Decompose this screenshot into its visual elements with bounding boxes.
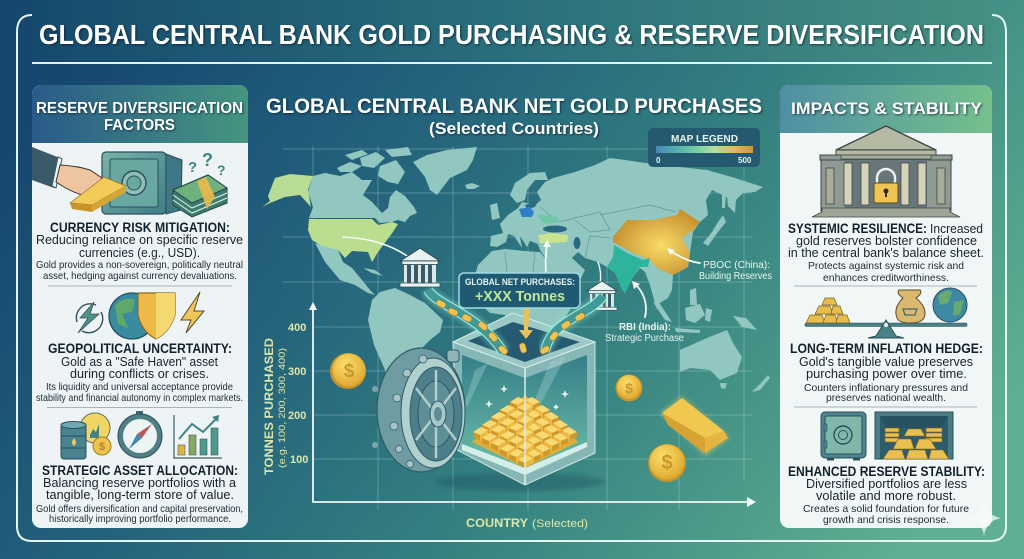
icon: gold in vault — [875, 412, 953, 459]
axis arrowheads — [309, 302, 756, 507]
x axis title: (Selected) — [532, 518, 588, 530]
panel heading: FACTORS — [104, 117, 175, 134]
y axis note: (e.g. 100, 200, 300, 400) — [277, 348, 288, 468]
panel heading: RESERVE DIVERSIFICATION — [36, 100, 243, 117]
panel: impacts and stability — [780, 85, 992, 528]
arrowheads on map — [543, 240, 675, 289]
arrows on map — [343, 237, 700, 317]
china label: Building Reserves — [699, 271, 772, 282]
text: enhanced reserve stability: growth and crisis response. — [823, 514, 949, 526]
coin: left — [330, 353, 366, 389]
text: currency risk mitigation: CURRENCY RISK MITIGATION: — [50, 220, 230, 235]
text: currency risk mitigation — [36, 220, 243, 282]
gold arrow centre — [519, 306, 533, 354]
sparkle — [968, 503, 1001, 536]
panel: world map — [262, 146, 770, 510]
coin: middle — [616, 374, 642, 402]
bank icon: right — [587, 281, 617, 310]
map legend: 500 — [738, 156, 752, 165]
x axis title: COUNTRY — [466, 518, 528, 530]
icon: safe — [821, 412, 866, 460]
text: strategic asset allocation: Balancing reserve portfolios with a — [43, 475, 237, 490]
text: systemic resilience: SYSTEMIC RESILIENCE: — [788, 221, 927, 236]
text: enhanced reserve stability: Diversified portfolios are less — [806, 476, 967, 491]
gold vault box — [435, 313, 605, 491]
icon: question marks — [188, 150, 226, 178]
gold flow: right — [539, 296, 603, 355]
banner rule — [32, 62, 992, 64]
panel heading: IMPACTS & STABILITY — [791, 99, 983, 118]
icon: volatility arrows — [76, 302, 103, 333]
icon: bar chart — [174, 415, 222, 458]
text: systemic resilience — [788, 221, 984, 284]
text: geopolitical uncertainty: Its liquidity and universal acceptance provide — [46, 381, 233, 393]
text: systemic resilience: enhances creditworthiness. — [823, 272, 949, 284]
text: enhanced reserve stability: volatile and more robust. — [816, 488, 956, 503]
panel header — [780, 85, 992, 133]
callout: GLOBAL NET PURCHASES: — [465, 277, 575, 287]
callout — [459, 273, 580, 308]
text: long-term inflation hedge: preserves national wealth. — [826, 392, 946, 404]
text: strategic asset allocation: tangible, long-term store of value. — [46, 487, 234, 502]
chart axes — [313, 306, 751, 502]
icon: cash stack — [173, 175, 227, 217]
bank icon: left — [400, 248, 440, 287]
gold flow: left — [428, 290, 509, 356]
gold bar — [660, 396, 730, 456]
india label: RBI (India): — [619, 322, 671, 333]
text: systemic resilience: Protects against systemic risk and — [808, 260, 964, 272]
y axis ticks: 300 — [288, 366, 306, 378]
china — [613, 209, 700, 275]
coin: lower right — [648, 444, 686, 482]
coin: left: $ — [344, 361, 355, 382]
panel header — [32, 85, 248, 143]
panel heading — [36, 100, 243, 134]
text: long-term inflation hedge: Counters inflationary pressures and — [804, 382, 968, 394]
icon: balance scale — [805, 288, 967, 338]
text: geopolitical uncertainty: during conflicts or crises. — [70, 366, 209, 381]
text: currency risk mitigation: Reducing reliance on specific reserve — [36, 232, 243, 247]
text: enhanced reserve stability — [788, 464, 985, 526]
text: strategic asset allocation: Gold offers diversification and capital preservation, — [36, 503, 243, 515]
text: geopolitical uncertainty: stability and financial autonomy in complex markets. — [36, 392, 243, 404]
title banner — [32, 0, 992, 60]
central heading: GLOBAL CENTRAL BANK NET GOLD PURCHASES — [266, 95, 762, 118]
map legend: MAP LEGEND — [671, 134, 738, 145]
text: strategic asset allocation — [36, 463, 243, 525]
icon: compass — [118, 411, 162, 458]
text: geopolitical uncertainty: GEOPOLITICAL UNCERTAINTY: — [48, 341, 232, 356]
india label: Strategic Purchase — [605, 333, 684, 344]
text: geopolitical uncertainty: Gold as a "Safe Haven" asset — [61, 354, 218, 369]
text: strategic asset allocation: historically improving portfolio performance. — [49, 513, 231, 525]
alaska — [262, 174, 313, 207]
text: strategic asset allocation: STRATEGIC ASSET ALLOCATION: — [42, 463, 238, 478]
map legend: 0 — [656, 156, 661, 165]
text: currency risk mitigation: currencies (e.g., USD). — [79, 245, 200, 260]
map legend — [648, 128, 760, 167]
gold pyramid — [472, 395, 578, 468]
icon: hand with gold bar — [32, 147, 126, 212]
icon: safe — [102, 152, 182, 214]
panel: reserve diversification factors — [32, 85, 248, 528]
text: long-term inflation hedge: purchasing power over time. — [806, 366, 967, 381]
x axis title — [466, 518, 588, 530]
text: long-term inflation hedge — [790, 341, 983, 404]
vault door — [372, 348, 465, 472]
y axis title: TONNES PURCHASED — [262, 338, 276, 475]
text: systemic resilience: gold reserves bolster confidence — [796, 233, 977, 248]
text: enhanced reserve stability: Creates a solid foundation for future — [803, 503, 969, 515]
usa — [308, 219, 398, 262]
icon: question marks: ? — [217, 162, 226, 178]
turkey — [538, 233, 568, 243]
coin: middle: $ — [625, 380, 633, 396]
y axis ticks: 200 — [288, 410, 306, 422]
text: long-term inflation hedge: Gold's tangible value preserves — [799, 354, 973, 369]
india label — [605, 322, 684, 344]
icon: bank with padlock — [812, 126, 960, 217]
icon: question marks: ? — [202, 150, 213, 170]
text: long-term inflation hedge: LONG-TERM INFLATION HEDGE: — [790, 341, 983, 356]
india — [607, 245, 650, 293]
ukraine — [537, 215, 560, 224]
y axis ticks: 400 — [288, 322, 306, 334]
text: systemic resilience: in the central bank's balance sheet. — [788, 245, 984, 260]
text: currency risk mitigation: Gold provides a non-sovereign, politically neutral — [36, 259, 243, 271]
icon: oil barrel and coin — [61, 413, 111, 459]
text: currency risk mitigation: asset, hedging against currency devaluations. — [43, 270, 237, 282]
icon: oil barrel and coin: $ — [99, 441, 105, 453]
text: enhanced reserve stability: ENHANCED RESERVE STABILITY: — [788, 464, 985, 479]
icon: lightning bolt — [181, 292, 204, 333]
text: systemic resilience: Increased — [930, 221, 983, 236]
china label — [699, 260, 772, 282]
y axis ticks: 100 — [290, 454, 308, 466]
icon: question marks: ? — [188, 159, 197, 176]
y axis ticks — [288, 322, 308, 466]
coin: lower right: $ — [661, 452, 673, 474]
poland — [519, 207, 534, 217]
callout: +XXX Tonnes — [475, 289, 565, 305]
china label: PBOC (China): — [703, 260, 770, 271]
text: geopolitical uncertainty — [36, 341, 243, 404]
central subheading: (Selected Countries) — [429, 119, 599, 138]
icon: globe with shield — [109, 293, 175, 339]
